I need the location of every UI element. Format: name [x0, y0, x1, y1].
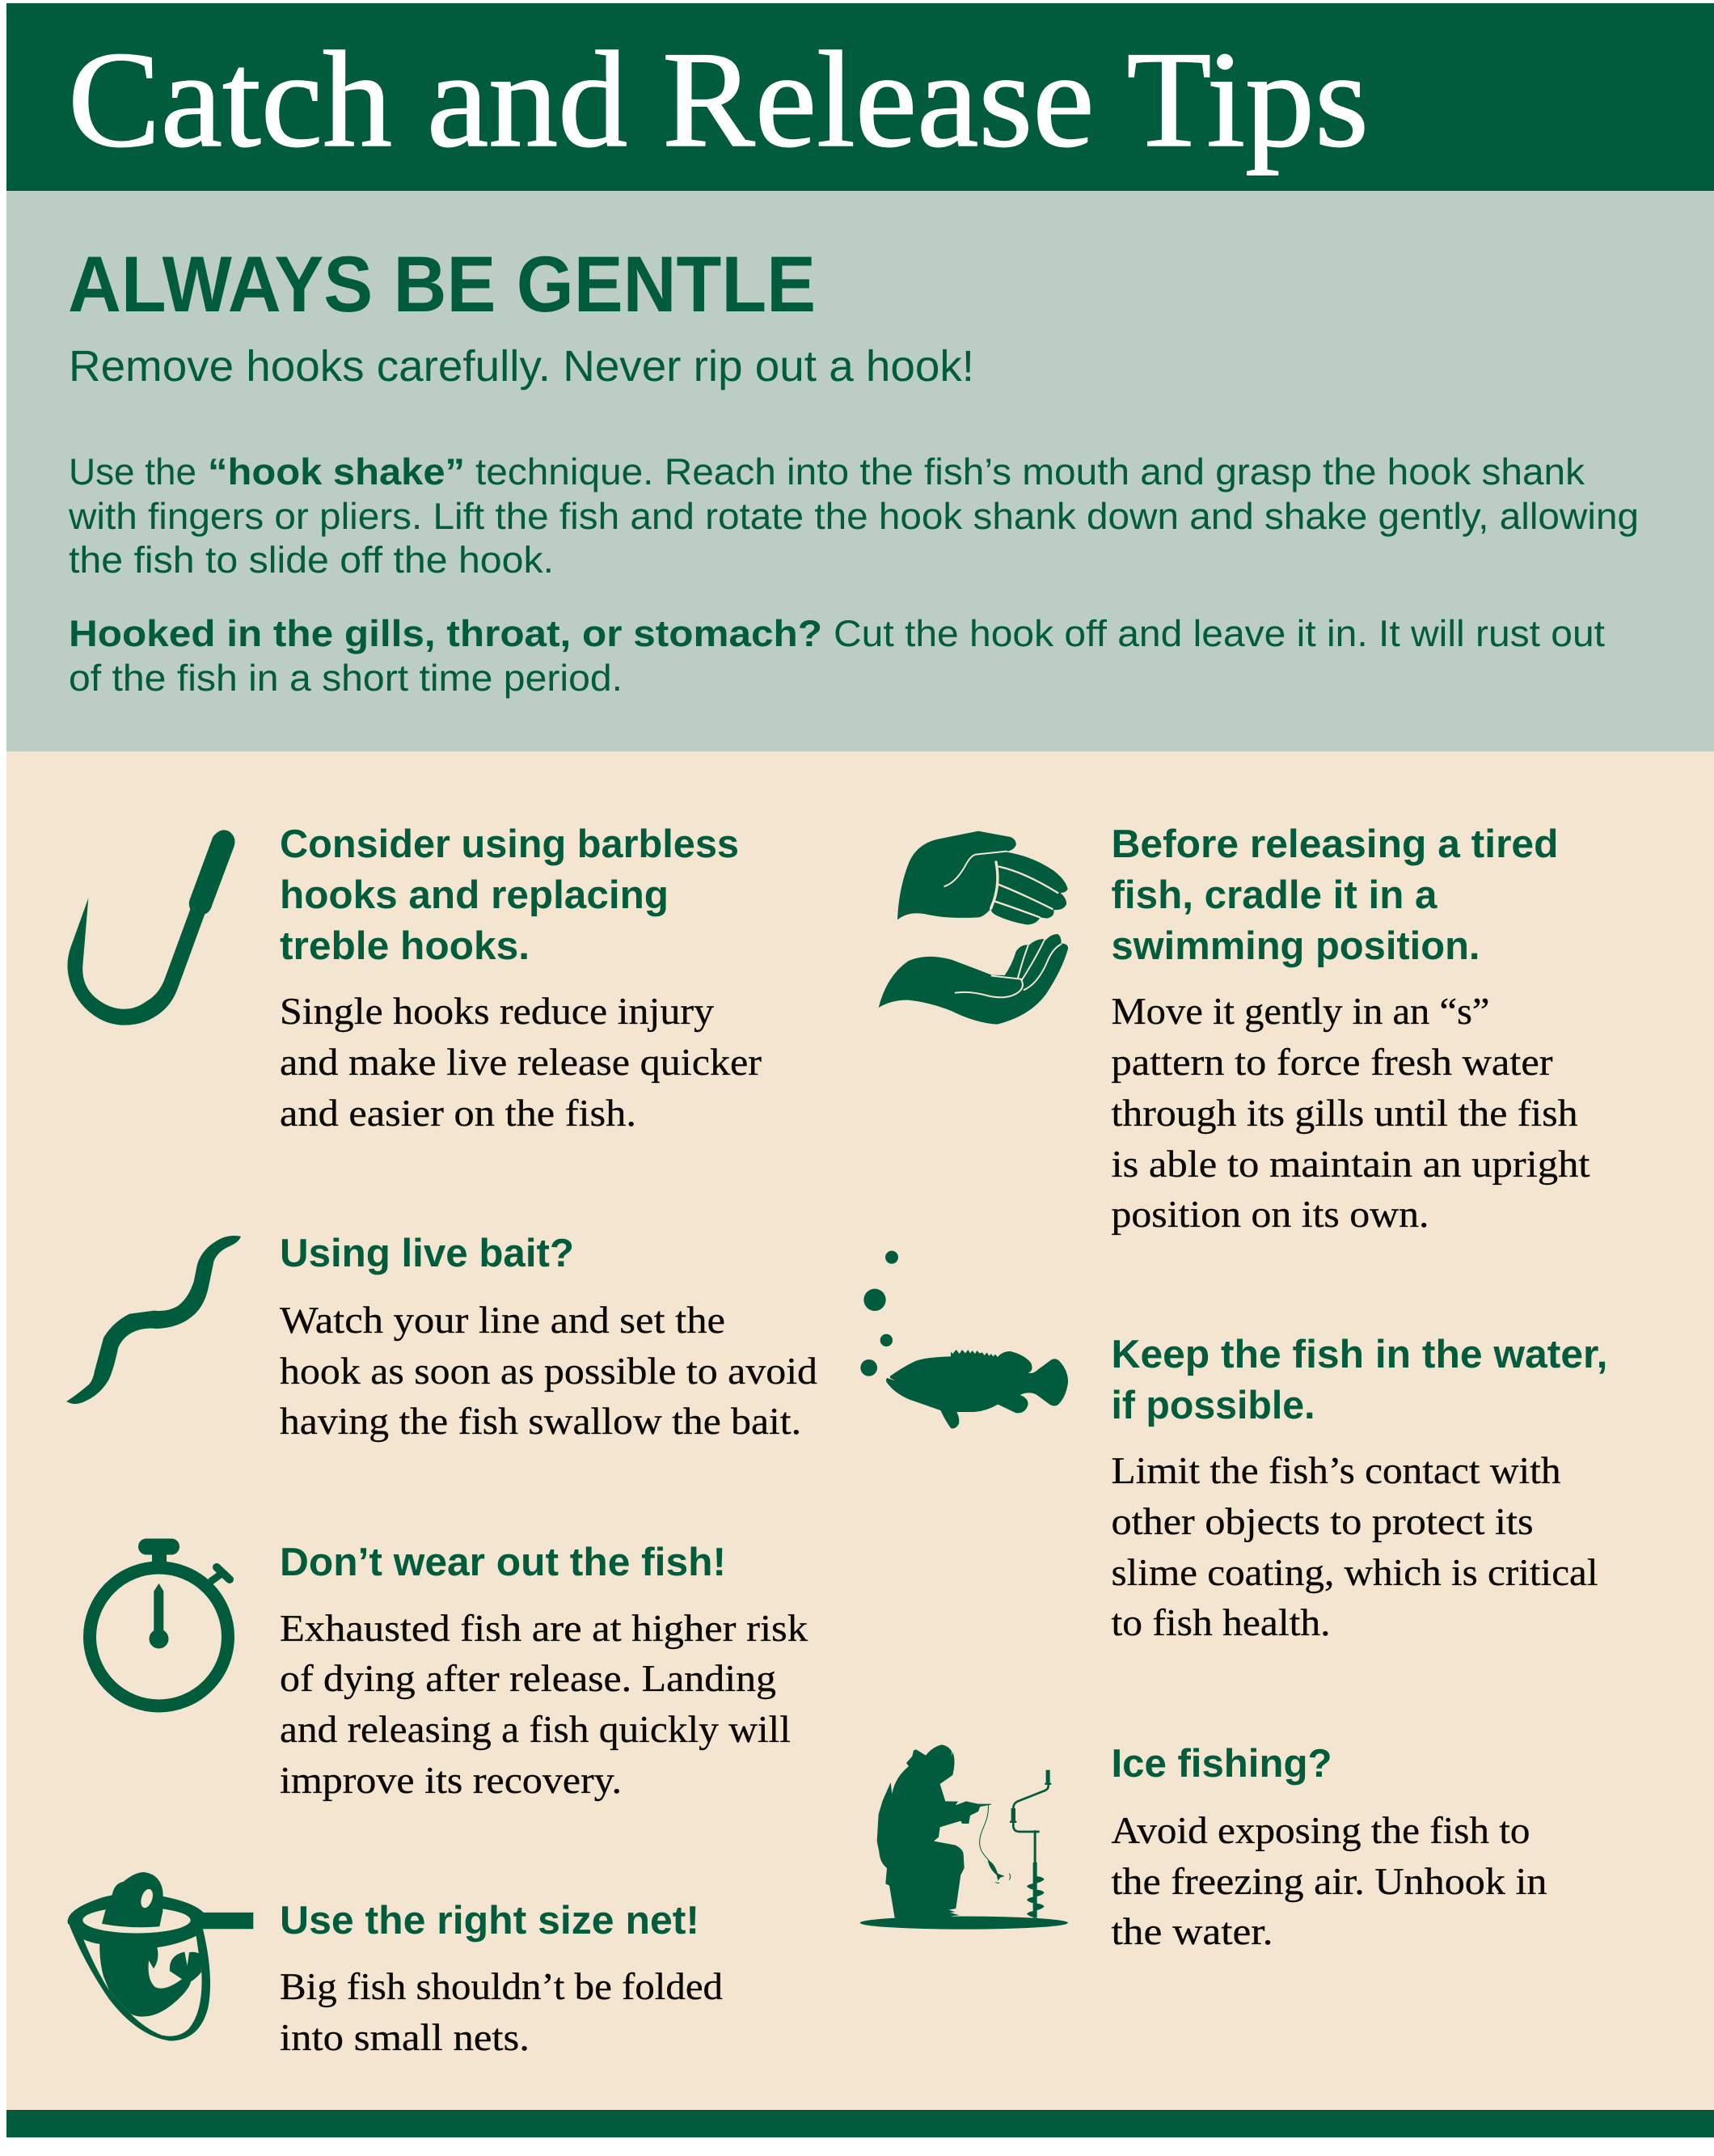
- icon: worm: [68, 1237, 239, 1403]
- text block: hooked in the gills: [69, 612, 1605, 699]
- panel: beige tips background: [6, 751, 1714, 2111]
- title banner: [6, 3, 1714, 191]
- text: ice fishing: Avoid exposing the fish to: [1111, 1810, 1530, 1852]
- text: cradle the fish: pattern to force fresh water: [1111, 1042, 1553, 1084]
- text: don't wear out the fish: improve its recovery.: [280, 1760, 622, 1802]
- text: barbless hooks: treble hooks.: [280, 924, 530, 968]
- text: cradle the fish: Before releasing a tired: [1111, 822, 1559, 866]
- icon: hook: [67, 830, 235, 1025]
- text: cradle the fish: Move it gently in an “s”: [1111, 991, 1489, 1033]
- text: keep fish in water: other objects to protect its: [1111, 1501, 1533, 1543]
- text: don't wear out the fish: Exhausted fish are at higher risk: [280, 1608, 808, 1650]
- text: barbless hooks: Consider using barbless: [280, 822, 739, 866]
- text: don't wear out the fish: of dying after release. Landing: [280, 1658, 776, 1700]
- text: keep fish in water: slime coating, which is critical: [1111, 1552, 1598, 1594]
- footer bar: [6, 2110, 1714, 2137]
- text: live bait: Watch your line and set the: [280, 1300, 725, 1342]
- text: barbless hooks: [280, 822, 762, 1135]
- title: Catch and Release Tips: [68, 23, 1369, 175]
- text: ice fishing: Ice fishing?: [1111, 1742, 1332, 1786]
- icon: stopwatch: [90, 1538, 230, 1706]
- text: keep fish in water: Limit the fish’s contact with: [1111, 1450, 1560, 1492]
- icon: ice fisher with auger: [860, 1744, 1068, 1930]
- text block: hooked in the gills: Cut the hook off and leave it in. It will rust out: [834, 612, 1605, 654]
- text: cradle the fish: fish, cradle it in a: [1111, 873, 1437, 917]
- text block: hook shake: Use the: [69, 450, 196, 492]
- text: cradle the fish: is able to maintain an upright: [1111, 1144, 1589, 1186]
- text: right size net: Big fish shouldn’t be folded: [280, 1966, 723, 2008]
- text block: hook shake: with fingers or pliers. Lift the fish and rotate the hook shank down and shake gently, allowing: [68, 495, 1639, 537]
- text: right size net: into small nets.: [280, 2017, 530, 2059]
- text: live bait: [280, 1232, 817, 1443]
- text: cradle the fish: through its gills until the fish: [1111, 1093, 1578, 1135]
- text: live bait: having the fish swallow the bait.: [280, 1401, 801, 1443]
- text: keep fish in water: if possible.: [1111, 1384, 1315, 1427]
- text: keep fish in water: Keep the fish in the water,: [1111, 1333, 1607, 1376]
- text: barbless hooks: and make live release quicker: [280, 1042, 762, 1084]
- text: barbless hooks: Single hooks reduce injury: [280, 991, 715, 1033]
- text: cradle the fish: position on its own.: [1111, 1194, 1429, 1236]
- text: don't wear out the fish: and releasing a fish quickly will: [280, 1709, 791, 1751]
- text: cradle the fish: swimming position.: [1111, 924, 1480, 968]
- text: live bait: hook as soon as possible to avoid: [280, 1351, 817, 1393]
- text: don't wear out the fish: [280, 1541, 808, 1802]
- text block: hooked in the gills: Hooked in the gills, throat, or stomach?: [69, 612, 822, 654]
- text block: hooked in the gills: of the fish in a short time period.: [69, 657, 623, 699]
- subheading: Remove hooks carefully. Never rip out a hook!: [69, 342, 974, 391]
- text: keep fish in water: [1111, 1333, 1607, 1644]
- text block: hook shake: [68, 450, 1639, 581]
- text block: hook shake: “hook shake”: [208, 450, 465, 492]
- panel: sage gentle section background: [6, 191, 1714, 751]
- text: keep fish in water: to fish health.: [1111, 1602, 1331, 1644]
- text: barbless hooks: hooks and replacing: [280, 873, 669, 917]
- text: cradle the fish: [1111, 822, 1589, 1236]
- icon: landing net with fish: [67, 1872, 253, 2041]
- text: right size net: Use the right size net!: [280, 1899, 699, 1943]
- text: don't wear out the fish: Don’t wear out the fish!: [280, 1541, 726, 1584]
- text: ice fishing: the freezing air. Unhook in: [1111, 1861, 1547, 1903]
- text block: hook shake: technique. Reach into the fish’s mouth and grasp the hook shank: [475, 450, 1585, 492]
- text: right size net: [280, 1899, 723, 2059]
- text: live bait: Using live bait?: [280, 1232, 574, 1275]
- icon: cradling hands: [879, 831, 1068, 1025]
- icon: fish and bubbles: [860, 1251, 1068, 1429]
- heading: always be gentle: ALWAYS BE GENTLE: [68, 239, 816, 328]
- text: barbless hooks: and easier on the fish.: [280, 1093, 636, 1135]
- text block: hook shake: the fish to slide off the hook.: [69, 539, 554, 581]
- text: ice fishing: the water.: [1111, 1911, 1273, 1953]
- text: ice fishing: [1111, 1742, 1547, 1953]
